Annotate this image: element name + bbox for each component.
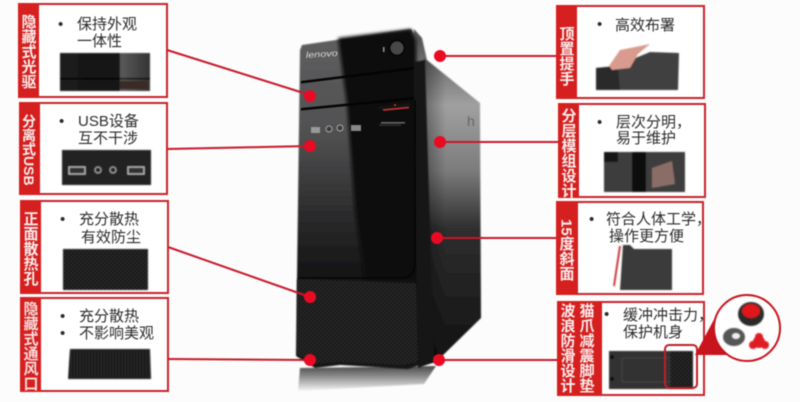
side label: 15度斜面 [558, 219, 574, 281]
side label: 正面散热孔 [22, 211, 38, 287]
door lower edge [298, 100, 415, 278]
slope image [614, 245, 672, 290]
panel: hidden optical drive: 保持外观 [77, 16, 137, 33]
bullet text: • [604, 306, 609, 323]
pad top [738, 302, 764, 326]
pad grey [723, 328, 745, 346]
side label: 隐藏式光驱 [20, 14, 36, 90]
panel: separated USB: USB设备 [78, 113, 139, 130]
bullet text: • [59, 113, 64, 130]
panel: layered modular design: 易于维护 [616, 130, 676, 147]
base image [609, 351, 693, 389]
marker dots [304, 50, 446, 366]
drive image [60, 53, 150, 91]
panel: hidden optical drive: 一体性 [77, 33, 122, 50]
side logo: h [467, 113, 475, 129]
card reader slot [379, 122, 405, 126]
eject button [376, 103, 410, 112]
dark front reflection [338, 29, 418, 282]
side label: 分层模组设计 [560, 108, 576, 199]
computer tower [296, 29, 481, 391]
panel: hidden air vent [20, 297, 168, 392]
panel: front vent holes: 有效防尘 [81, 229, 141, 246]
front USB ports [311, 125, 361, 133]
panel: top handle [556, 5, 704, 99]
handle image [596, 44, 679, 90]
second bay gap [301, 97, 414, 110]
panel: hidden air vent: 充分散热 [79, 308, 139, 325]
highlight box [665, 345, 697, 388]
panel: 15 degree slope [556, 201, 711, 295]
bullet text: • [60, 211, 65, 228]
bullet text: • [589, 211, 594, 228]
panel: layered modular design: 层次分明， [616, 114, 691, 131]
panel: front vent holes [20, 200, 168, 294]
module image [604, 152, 685, 192]
front face [296, 29, 420, 369]
logo: lenovo [305, 48, 338, 60]
panel: top handle: 高效布署 [615, 17, 675, 34]
front edge strip [414, 60, 434, 368]
side panel [414, 29, 481, 366]
panel: hidden air vent: 不影响美观 [79, 325, 154, 342]
bullet text: • [58, 16, 63, 33]
side label: 顶置提手 [558, 26, 574, 87]
pad red [749, 333, 769, 349]
panel: layered modular design [558, 103, 705, 199]
panel: claw shock pad: 保护机身 [623, 324, 683, 341]
panel: hidden air vent: • [60, 325, 65, 342]
panel: claw shock pad: 缓冲冲击力， [623, 307, 713, 324]
bullet text: • [597, 16, 602, 33]
side label left: 波浪防滑设计 [558, 302, 576, 394]
panel: separated USB: 互不干涉 [78, 130, 138, 147]
bullet text: • [60, 308, 65, 325]
callout: shock pad detail [695, 295, 780, 361]
side label: 分离式USB [21, 114, 37, 186]
side label: 隐藏式通风口 [22, 301, 38, 391]
panel: front vent holes: 充分散热 [79, 211, 139, 228]
panel: hidden optical drive [18, 3, 167, 98]
panel: separated USB [19, 102, 167, 195]
slotted vent image [68, 349, 151, 379]
USB ports image [62, 150, 151, 185]
panel: claw shock pad [557, 301, 713, 396]
panel: 15 degree slope: 符合人体工学， [606, 211, 711, 228]
power button [383, 40, 404, 56]
floor shadow [298, 366, 436, 391]
mesh grille [297, 279, 418, 365]
side label right: 猫爪减震脚垫 [578, 302, 594, 393]
bullet text: • [597, 114, 602, 131]
top bay gap [301, 67, 414, 84]
mesh image [63, 249, 148, 290]
panel: 15 degree slope: 操作更方便 [609, 228, 684, 245]
connector lines [167, 50, 558, 360]
